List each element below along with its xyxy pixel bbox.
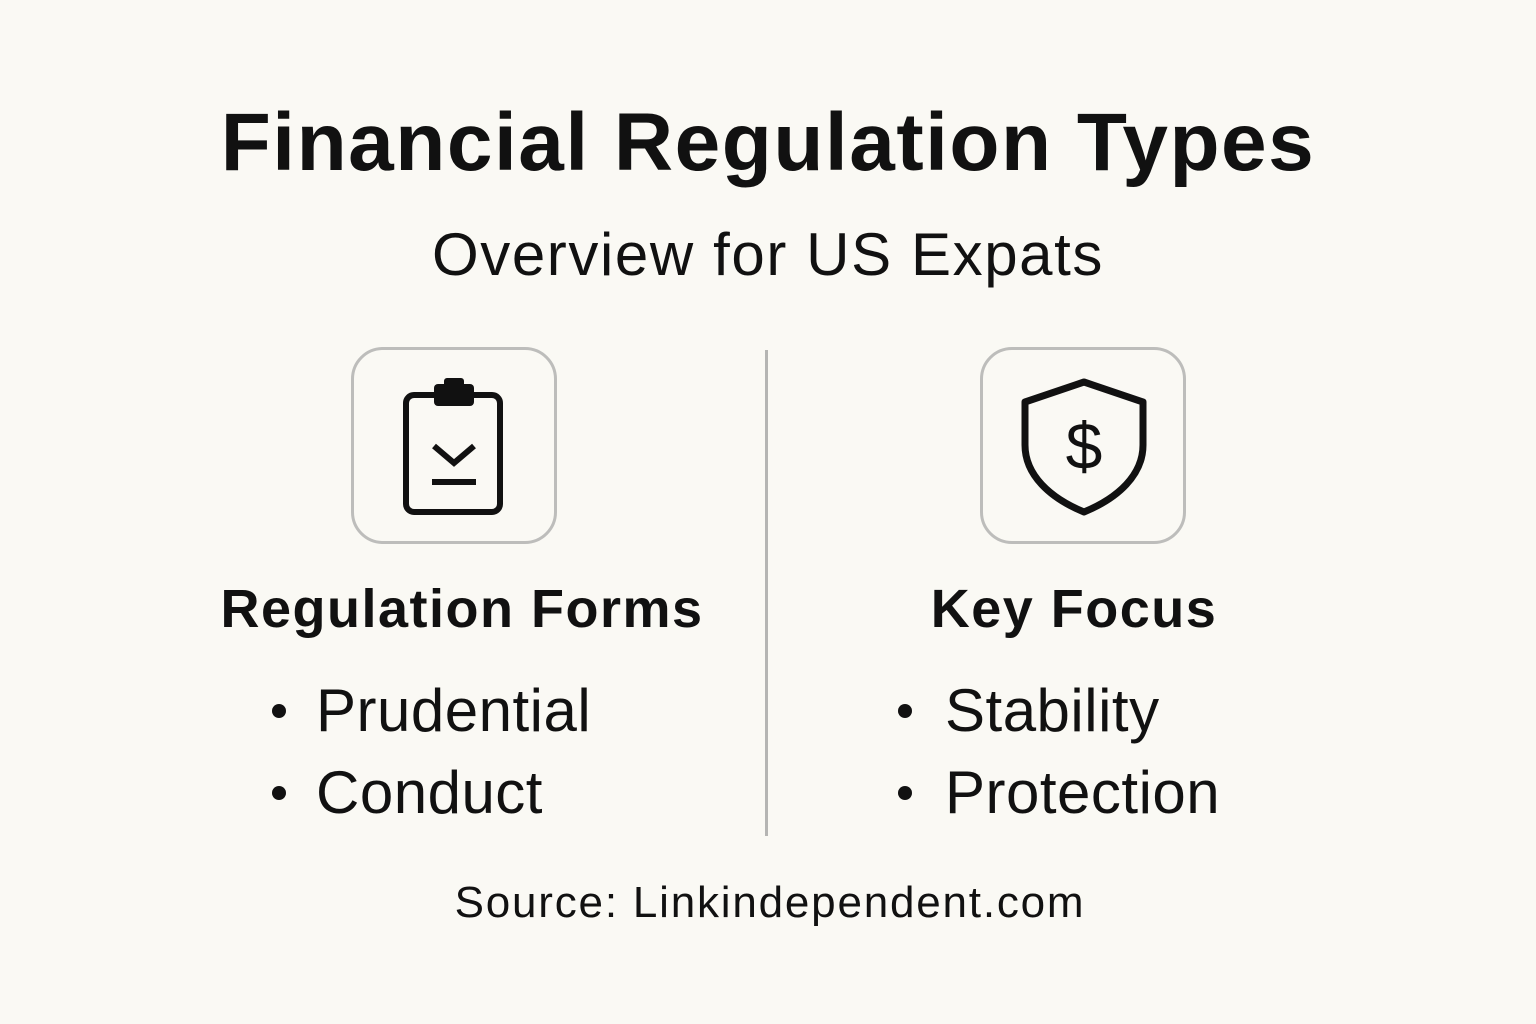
list item: protection: Protection (945, 759, 1220, 826)
icon: shield dollar (980, 347, 1186, 544)
heading: regulation forms: Regulation Forms (220, 579, 704, 639)
panel: regulation forms (220, 579, 704, 826)
icon: shield dollar: $ (1066, 409, 1102, 483)
heading: key focus: Key Focus (931, 579, 1217, 639)
panel: key focus (898, 579, 1220, 826)
divider (765, 350, 768, 836)
source: Source: Linkindependent.com (455, 878, 1085, 927)
list item: prudential: Prudential (316, 677, 591, 744)
list item: conduct: Conduct (316, 759, 543, 826)
title: Financial Regulation Types (221, 97, 1315, 188)
subtitle: Overview for US Expats (432, 221, 1104, 288)
icon: clipboard (351, 347, 557, 544)
list item: stability: Stability (945, 677, 1160, 744)
